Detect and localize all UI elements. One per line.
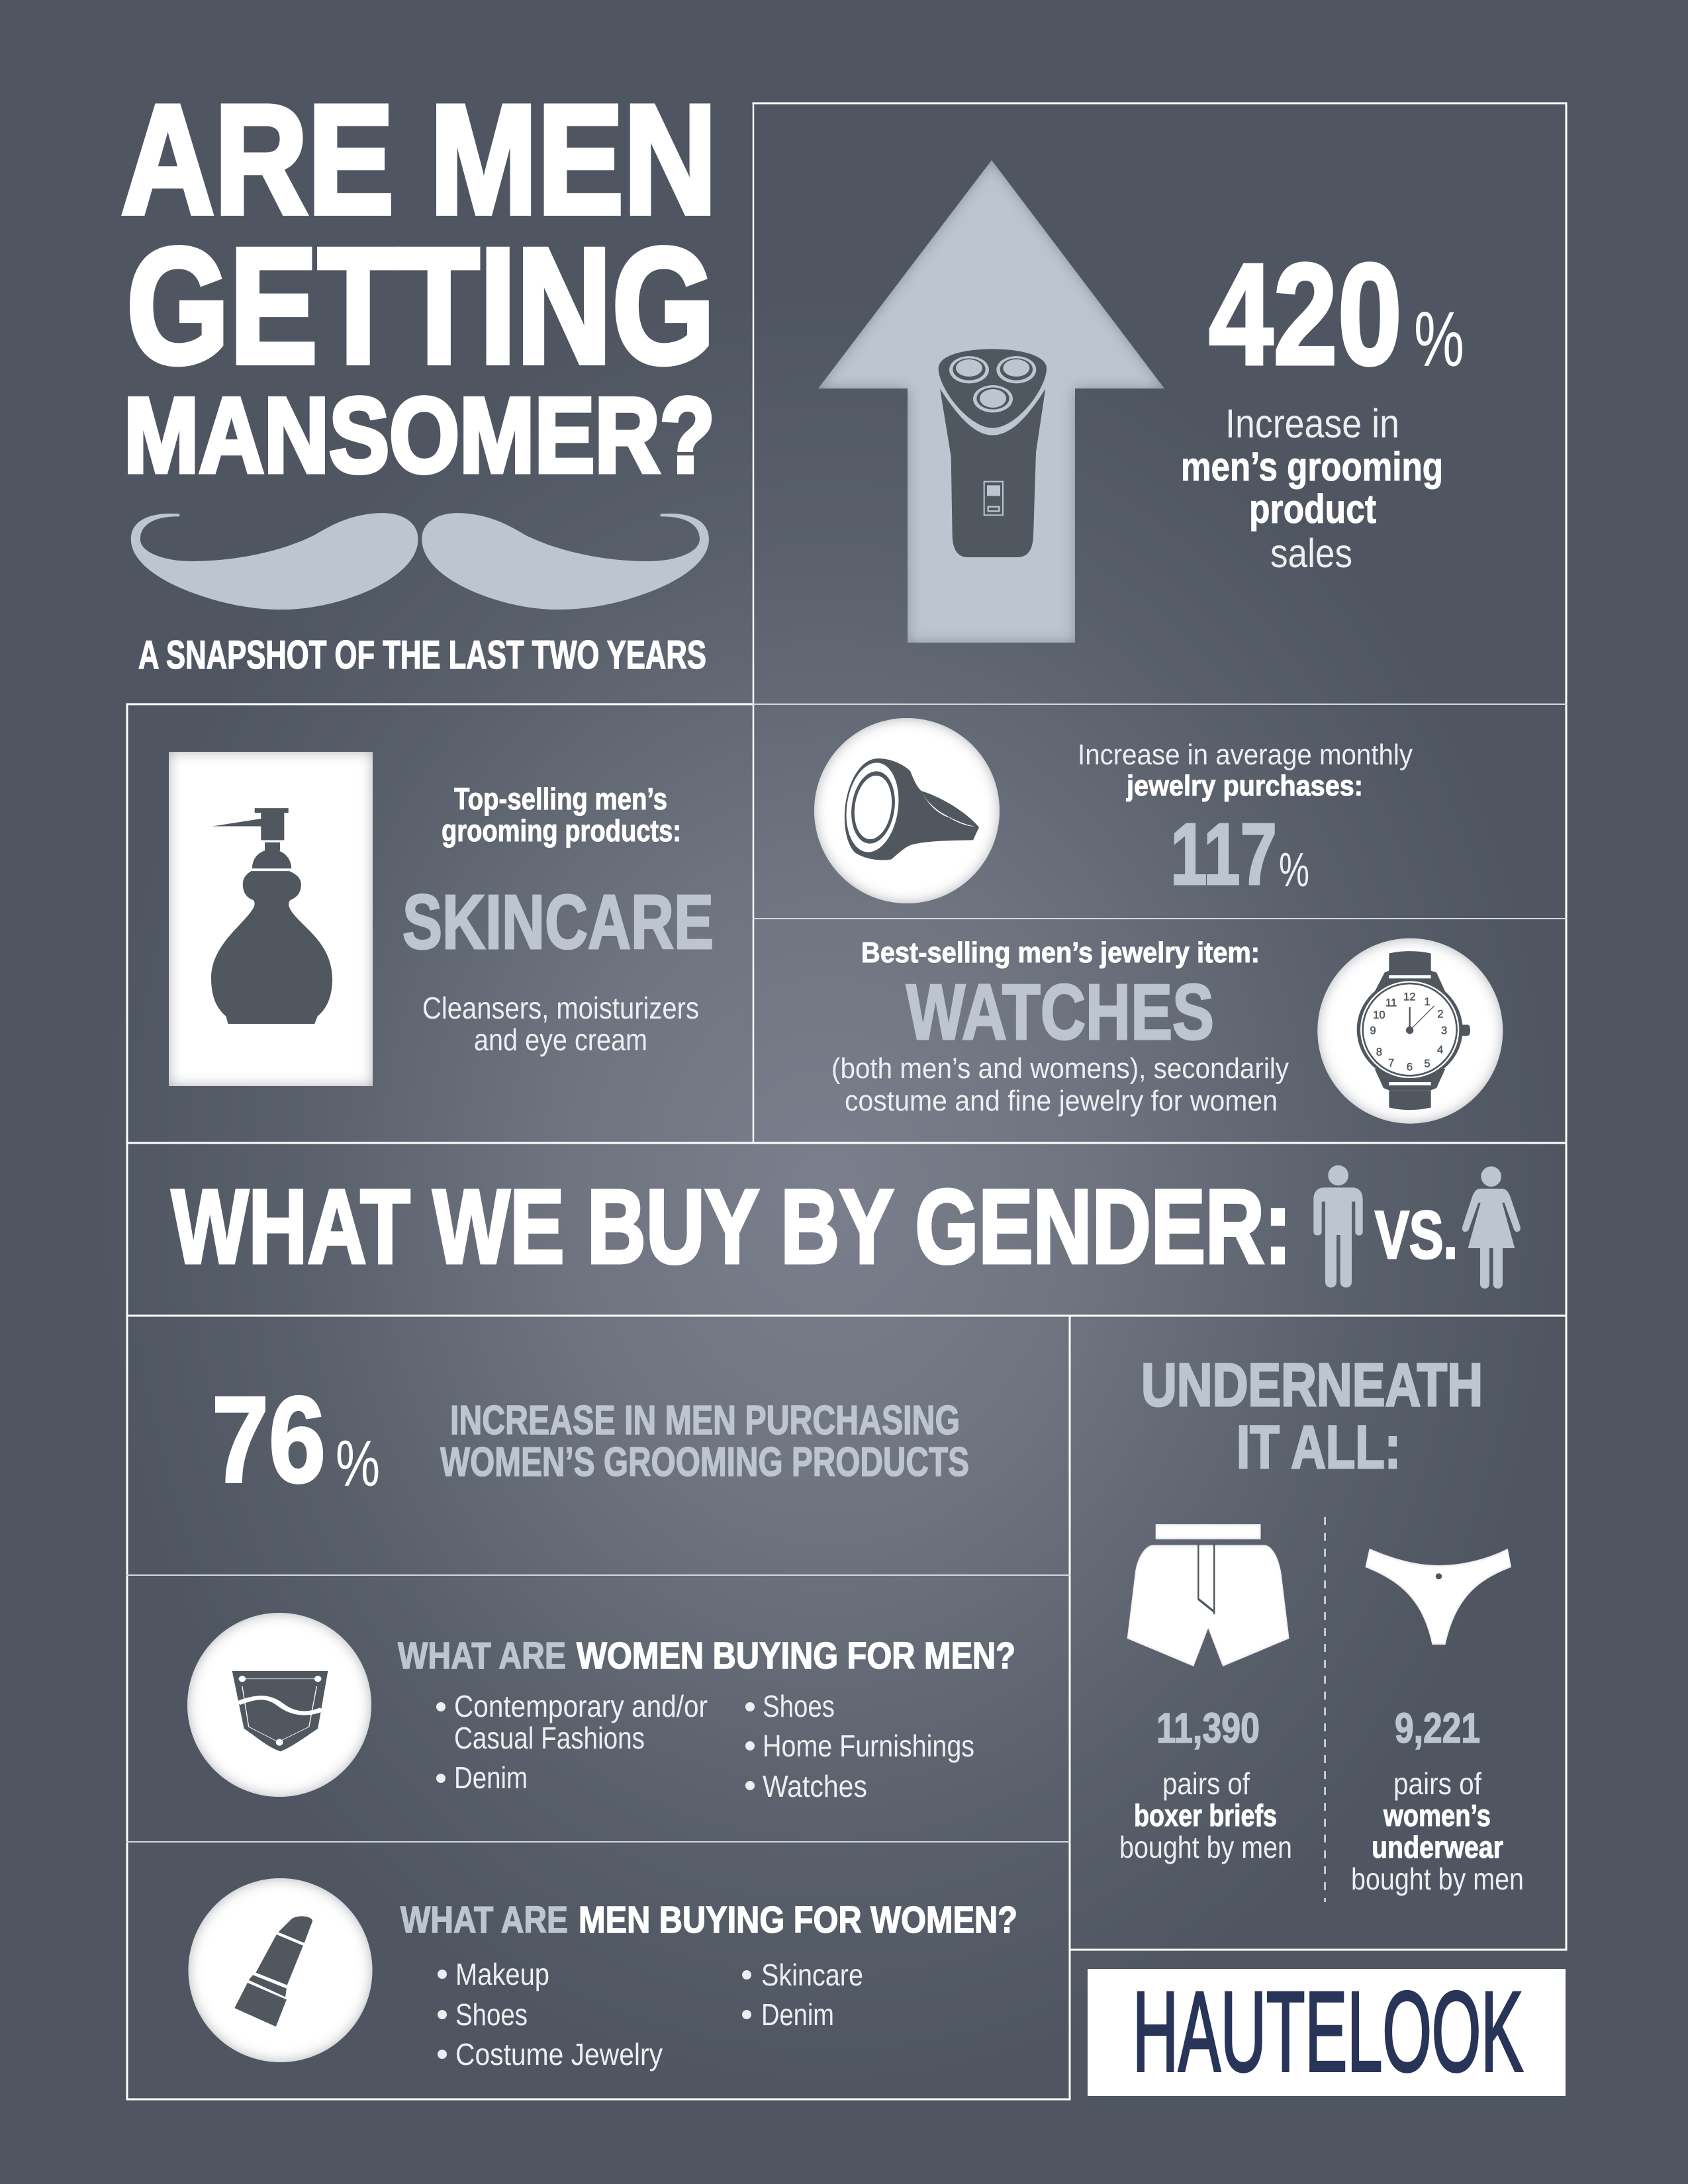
stat: 76 percent: 76 <box>212 1372 326 1508</box>
list: men buying for women: Denim <box>761 1997 834 2032</box>
panel: what men buy for women <box>188 1878 1017 2071</box>
panel frame lines <box>127 103 1566 2099</box>
heading: women buying for men <box>398 1635 1015 1677</box>
text: increase in grooming sales <box>1181 401 1443 576</box>
list: men buying for women: Skincare <box>761 1958 863 1992</box>
icon: watch: 10 <box>1373 1009 1385 1021</box>
heading: what we buy by gender: WHAT WE BUY BY GENDER: <box>171 1167 1291 1285</box>
icon: up arrow with shaver <box>818 160 1164 643</box>
text: increase in grooming sales: sales <box>1270 531 1352 576</box>
list: women buying for men: Denim <box>454 1760 528 1795</box>
stat: 420 percent: 420 <box>1209 234 1402 395</box>
stat: women's underwear: underwear <box>1372 1830 1503 1864</box>
heading: skincare: SKINCARE <box>402 879 714 965</box>
icon: lipstick <box>188 1878 372 2062</box>
list: men buying for women: Makeup <box>455 1957 549 1991</box>
text: vs: VS. <box>1375 1197 1458 1273</box>
text: top-selling grooming products: grooming products: <box>442 813 681 848</box>
divider: dashed line <box>1324 1517 1326 1902</box>
panel: skincare <box>169 752 714 1086</box>
stat: women's underwear: women’s <box>1383 1798 1491 1833</box>
icon: watch: 6 <box>1407 1061 1413 1073</box>
stat: women's underwear: pairs of <box>1393 1766 1481 1801</box>
icon: watch: 2 <box>1437 1007 1444 1020</box>
panel: jewelry purchases <box>814 718 1413 903</box>
heading: women buying for men: WHAT ARE <box>398 1635 566 1677</box>
text: increase in grooming sales: men’s grooming <box>1181 444 1443 489</box>
text: skincare examples: and eye cream <box>474 1023 647 1057</box>
stat: boxer briefs: boxer briefs <box>1134 1798 1277 1833</box>
list: women buying for men: Shoes <box>763 1689 835 1723</box>
title: MANSOMER? <box>124 376 715 495</box>
stat: 420 percent: % <box>1414 296 1464 383</box>
icon: watch: 4 <box>1437 1044 1443 1056</box>
icon: women's underwear <box>1365 1549 1511 1645</box>
subtitle: A SNAPSHOT OF THE LAST TWO YEARS <box>138 633 706 677</box>
text: top-selling grooming products <box>442 782 681 848</box>
text: watches detail: (both men’s and womens), secondarily <box>831 1052 1289 1085</box>
icon: watch: 1 <box>1424 995 1430 1008</box>
icon: watch: 12 <box>1403 991 1416 1003</box>
stat: boxer briefs: bought by men <box>1119 1830 1292 1864</box>
icon: ring <box>814 718 1000 903</box>
title <box>121 72 717 495</box>
heading: watches: WATCHES <box>906 968 1214 1056</box>
icon: woman <box>1462 1166 1521 1289</box>
text: top-selling grooming products: Top-selling men’s <box>454 782 667 816</box>
title: GETTING <box>126 214 715 398</box>
text: men purchasing women's products: WOMEN’S GROOMING PRODUCTS <box>440 1439 969 1485</box>
panel: what we buy by gender <box>171 1165 1521 1289</box>
text: men purchasing women's products <box>440 1398 969 1485</box>
list: men buying for women: Costume Jewelry <box>455 2037 663 2071</box>
heading: men buying for women <box>400 1899 1017 1941</box>
text: increase in jewelry purchases: jewelry purchases: <box>1126 770 1363 802</box>
text: increase in jewelry purchases <box>1078 739 1413 802</box>
text: increase in grooming sales: product <box>1249 486 1376 531</box>
stat: boxer briefs <box>1119 1704 1292 1864</box>
panel: underneath it all <box>1119 1351 1524 1902</box>
panel: grooming sales <box>818 160 1464 643</box>
list: women buying for men: Contemporary and/or <box>454 1689 708 1723</box>
text: best-selling jewelry item: Best-selling men’s jewelry item: <box>861 936 1260 969</box>
heading: underneath it all: IT ALL: <box>1237 1414 1401 1481</box>
text: skincare examples <box>422 991 699 1057</box>
stat: boxer briefs: 11,390 <box>1156 1704 1260 1752</box>
heading: underneath it all <box>1141 1351 1483 1481</box>
title: ARE MEN <box>121 72 717 246</box>
icon: boxer briefs <box>1127 1524 1289 1666</box>
text: watches detail: costume and fine jewelry for women <box>845 1085 1278 1117</box>
text: watches detail <box>831 1052 1289 1117</box>
list: men buying for women <box>438 1957 863 2071</box>
icon: watch: 5 <box>1424 1057 1430 1069</box>
icon: man <box>1313 1165 1363 1288</box>
heading: men buying for women: WHAT ARE <box>400 1899 568 1941</box>
panel: best-selling jewelry <box>831 936 1503 1124</box>
text: increase in grooming sales: Increase in <box>1225 401 1399 446</box>
list: women buying for men <box>436 1689 974 1803</box>
text: increase in jewelry purchases: Increase in average monthly <box>1078 739 1413 771</box>
list: women buying for men: Watches <box>763 1769 867 1803</box>
stat: 117 percent: % <box>1279 844 1309 897</box>
stat: women's underwear: 9,221 <box>1395 1704 1480 1752</box>
icon: moustache <box>131 513 709 610</box>
list: men buying for women: Shoes <box>455 1997 528 2032</box>
icon: watch: 7 <box>1388 1056 1394 1069</box>
stat: 117 percent: 117 <box>1170 805 1277 903</box>
list: women buying for men: Casual Fashions <box>454 1721 645 1755</box>
panel: 76 percent <box>212 1372 969 1508</box>
stat: women's underwear <box>1351 1704 1524 1896</box>
heading: underneath it all: UNDERNEATH <box>1141 1351 1483 1419</box>
heading: men buying for women: MEN BUYING FOR WOMEN? <box>579 1899 1017 1941</box>
stat: boxer briefs: pairs of <box>1162 1766 1250 1801</box>
text: men purchasing women's products: INCREASE IN MEN PURCHASING <box>450 1398 960 1443</box>
icon: watch: 3 <box>1441 1024 1447 1036</box>
list: women buying for men: Home Furnishings <box>763 1729 974 1763</box>
icon: watch <box>1317 938 1503 1124</box>
icon: watch: 9 <box>1370 1024 1376 1036</box>
icon: pump bottle <box>169 752 373 1086</box>
panel: what women buy for men <box>187 1613 1015 1803</box>
stat: 76 percent: % <box>336 1427 380 1500</box>
text: skincare examples: Cleansers, moisturizers <box>422 991 699 1025</box>
icon: watch: 11 <box>1385 997 1397 1009</box>
icon: watch: 8 <box>1376 1046 1382 1058</box>
heading: women buying for men: WOMEN BUYING FOR MEN? <box>577 1635 1015 1677</box>
stat: women's underwear: bought by men <box>1351 1862 1524 1896</box>
icon: jeans pocket <box>187 1613 371 1797</box>
